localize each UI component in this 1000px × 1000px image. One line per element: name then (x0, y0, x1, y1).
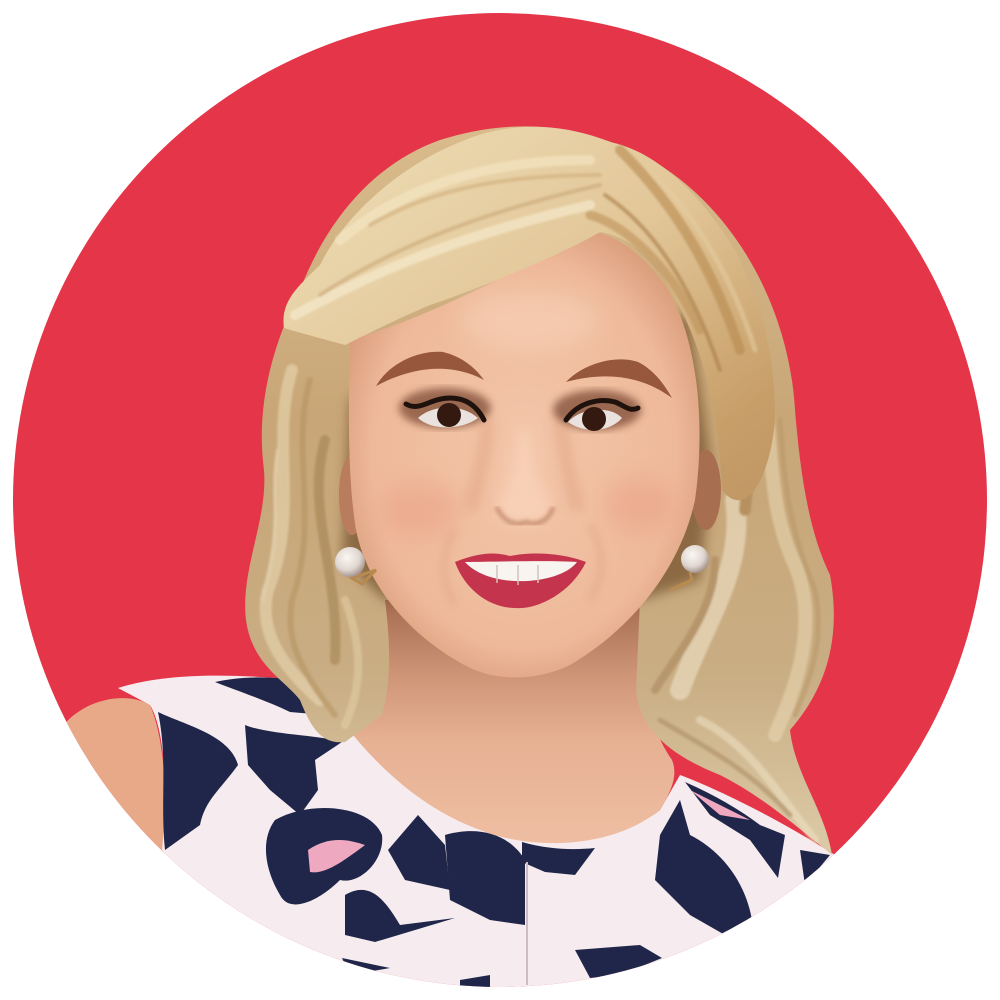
back hair (245, 126, 834, 855)
dress: pink accents (308, 790, 750, 872)
left arm (66, 698, 164, 850)
hair: side strands (262, 330, 818, 840)
right earring (670, 545, 709, 590)
face: cheek blush (380, 290, 676, 538)
dress: centre pleat (526, 862, 528, 985)
smile lines (594, 532, 599, 548)
front hair sweep (283, 127, 775, 500)
nose (470, 420, 578, 524)
face (349, 232, 700, 677)
figure (0, 126, 835, 1000)
mouth (455, 554, 586, 608)
neck (345, 585, 674, 843)
hair shadow around face (342, 300, 712, 600)
right eyebrow (566, 359, 672, 398)
left eyebrow (376, 352, 484, 386)
right eye (553, 390, 641, 431)
left earring (335, 547, 376, 584)
left eye (399, 388, 491, 428)
right ear (691, 450, 721, 530)
dress: navy floral pattern (158, 677, 830, 995)
hair: top strands (295, 150, 755, 370)
dress (118, 676, 835, 1000)
left ear (339, 456, 356, 535)
